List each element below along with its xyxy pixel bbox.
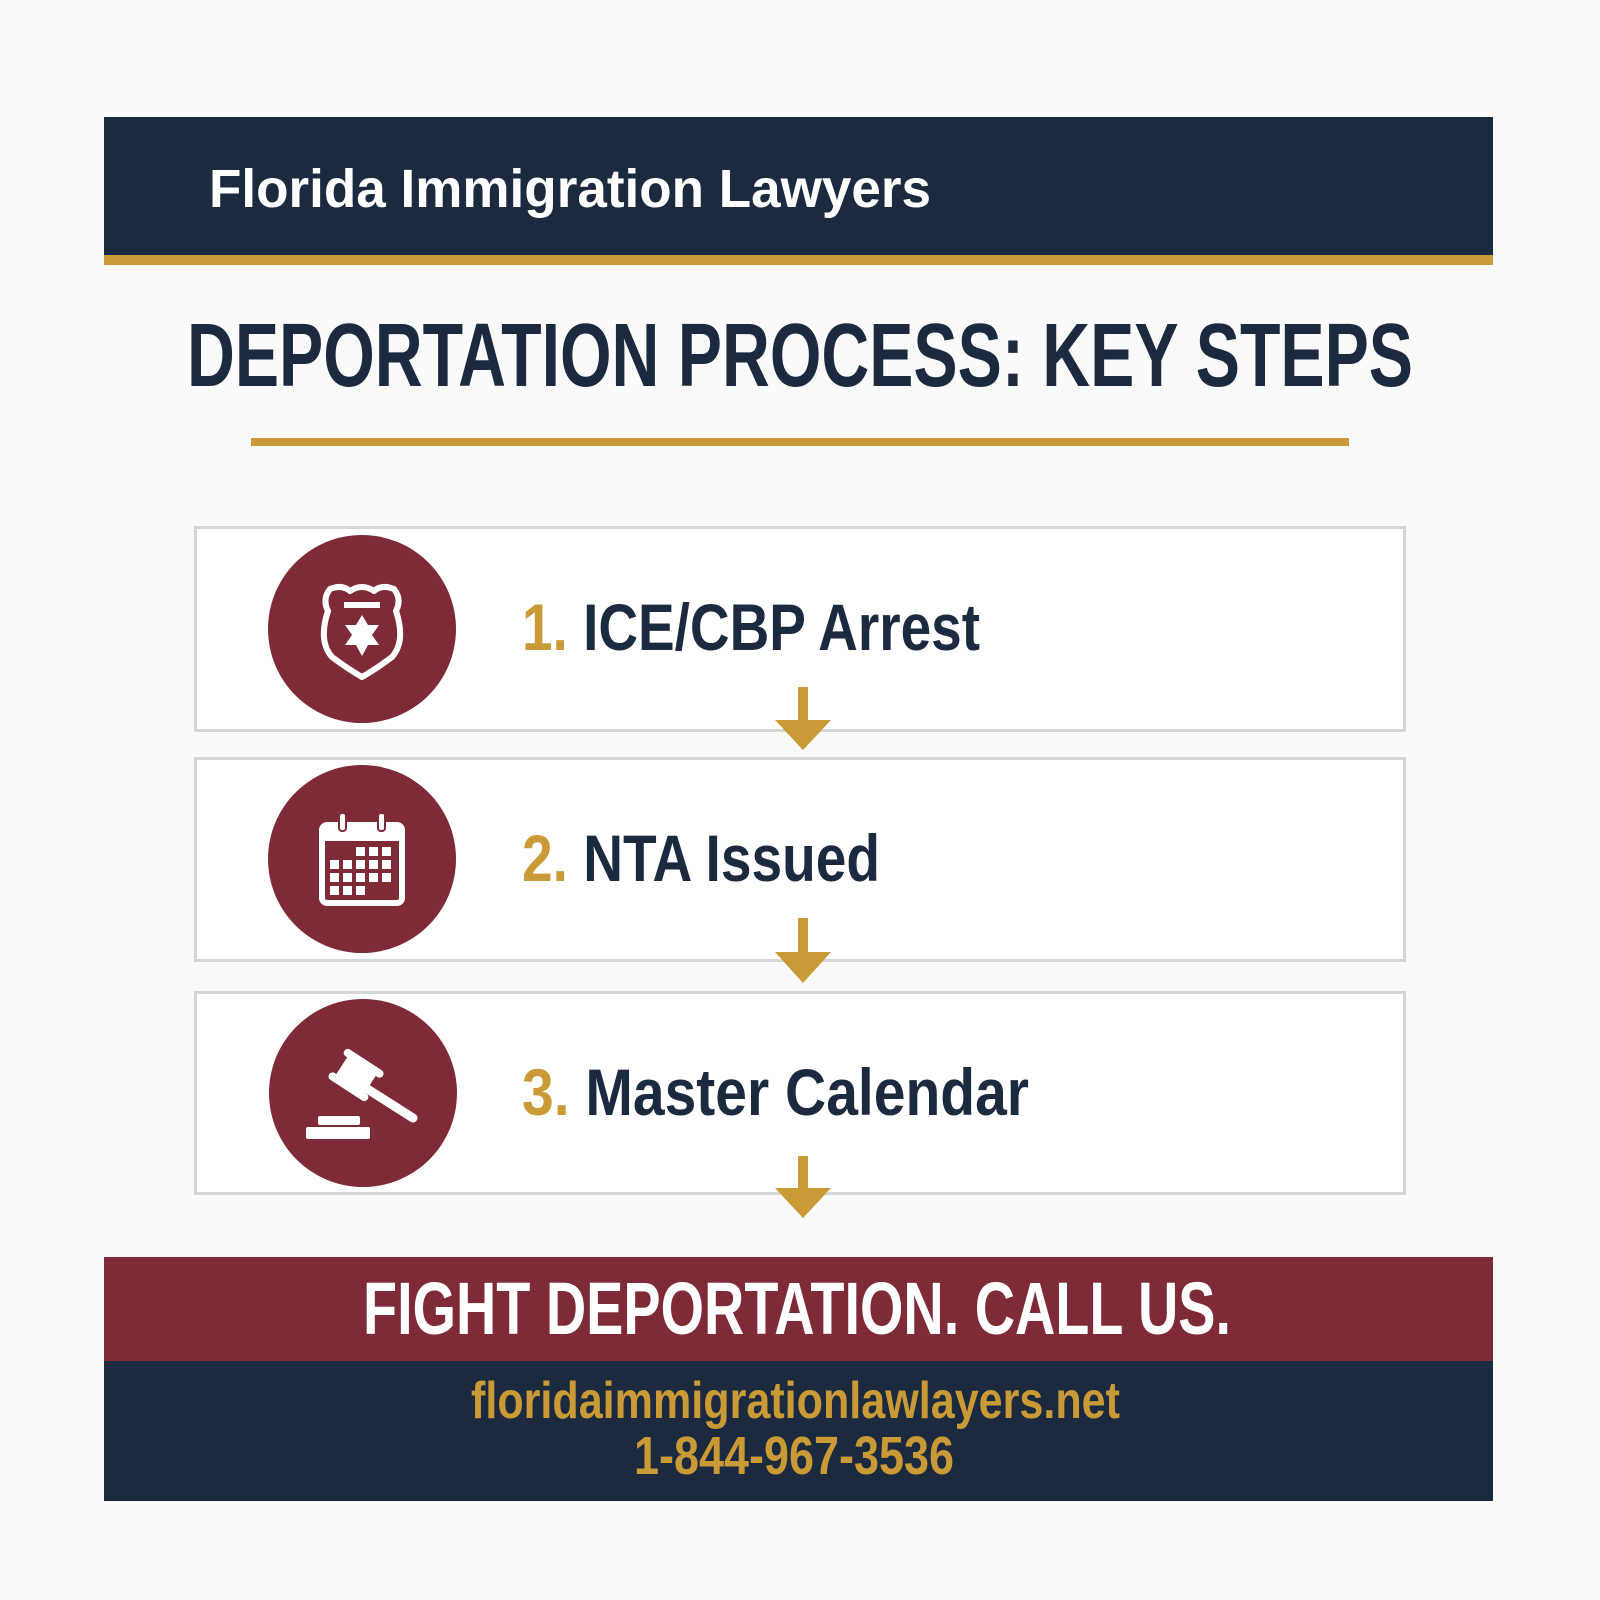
arrow 2 [775,918,831,983]
arrow 3 [775,1156,831,1218]
step 3 panel [196,992,1404,1194]
contact footer: floridaimmigrationlawlayers.net [471,1372,1120,1430]
arrow 1 [775,687,831,750]
step 1 panel [196,528,1404,730]
call to action band [104,1257,1493,1361]
step 1 text: 1. ICE/CBP Arrest [522,590,980,664]
step 2 text: 2. NTA Issued [522,821,880,895]
icon: badge [268,535,456,723]
header bar [104,117,1493,265]
call to action band: FIGHT DEPORTATION. CALL US. [363,1267,1231,1350]
icon: calendar [268,765,456,953]
icon: gavel [269,999,457,1187]
header text: Florida Immigration Lawyers [209,159,931,219]
step 2 panel [196,758,1404,960]
contact footer [104,1361,1493,1501]
step 3 text: 3. Master Calendar [522,1055,1029,1129]
contact footer: 1-844-967-3536 [634,1426,954,1486]
